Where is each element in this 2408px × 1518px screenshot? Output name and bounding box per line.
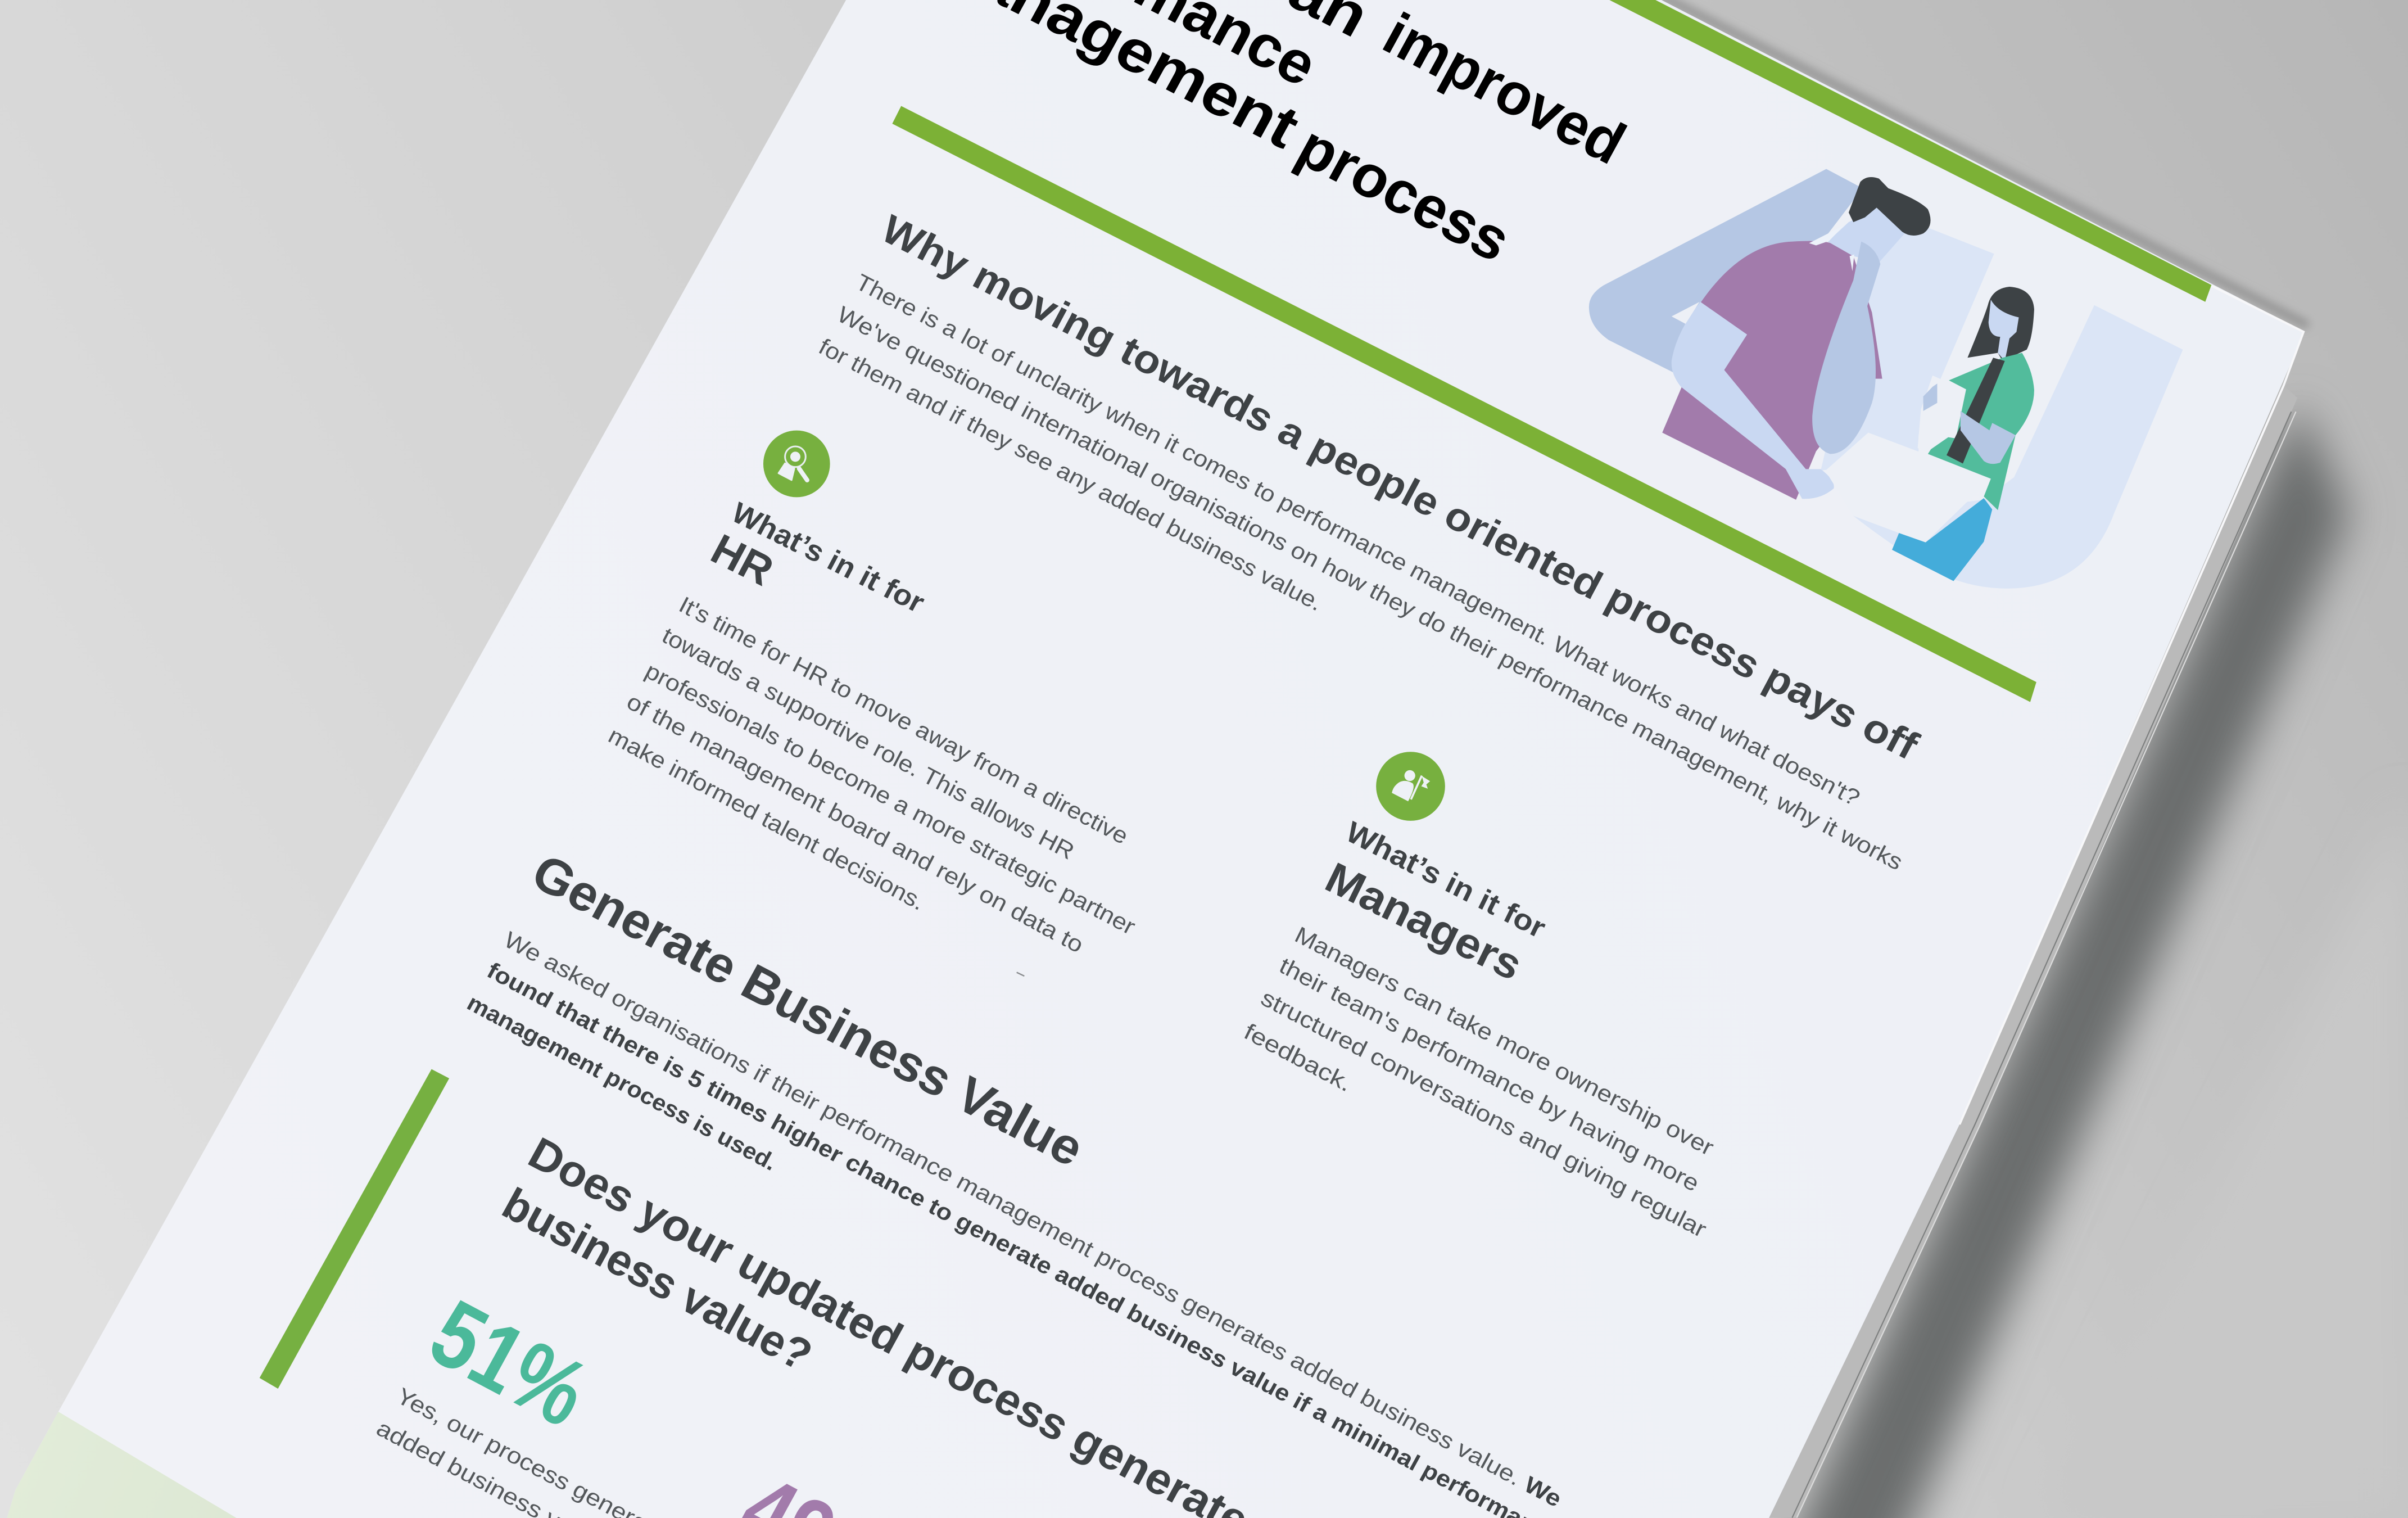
light green band at bottom of page [6,1412,241,1518]
statistic: 51%: 51% [414,1280,605,1447]
page edge highlights [1959,286,2303,1124]
subheading: what's in it for Managers: What’s in it for [1341,815,1551,945]
Managers paragraph: feedback. [1240,1018,1356,1097]
backdrop shape: U [1853,305,2183,589]
green divider bar [892,106,2036,702]
section heading: why moving: Why moving towards a people oriented process pays off [874,207,1925,769]
intro paragraph: for them and if they see any added business value. [814,333,1327,616]
woman top [1928,353,2034,510]
HR paragraph: make informed talent decisions. [604,722,929,915]
title [915,0,1636,274]
woman legs [1892,498,1992,581]
laptop [1825,432,1991,543]
Managers paragraph: structured conversations and giving regular [1257,984,1710,1243]
HR paragraph: professionals to become a more strategic partner [641,657,1139,940]
man collar [1809,225,1844,246]
woman hand [1923,383,1937,411]
drop shadow of brochure [1766,403,2350,1518]
Managers paragraph: their team's performance by having more [1275,952,1703,1197]
business value paragraph: We asked organisations if their performance management process generates added business value. We [500,927,1566,1512]
backdrop shape: dark [1589,169,1863,374]
icon: magnifier over person [763,431,830,497]
HR paragraph: towards a supportive role. This allows HR [658,622,1079,865]
icon: person with flag [1376,752,1445,821]
brochure page stack edge [1768,386,2297,1517]
woman face [1989,300,2019,361]
subheading: what's in it for Managers [1318,815,1551,990]
top green bar [1609,0,2211,302]
lighter floor patch, lower right [2043,799,2408,1517]
intro paragraph: We've questioned international organisations on how they do their performance management, why it works [833,301,1907,875]
statistic: 51% [372,1280,683,1518]
paper held by woman [1918,376,1965,451]
speck [1017,973,1024,976]
woman arm [1961,411,2016,464]
HR paragraph [604,591,1139,958]
man neck and face [1828,207,1904,263]
title: process [1287,112,1522,274]
HR paragraph: of the management board and rely on data to [623,688,1088,958]
Managers paragraph [1240,921,1718,1243]
subheading: what's in it for HR: HR [704,525,781,595]
illustration: two colleagues with laptop [1589,169,2183,589]
intro paragraph: There is a lot of unclarity when it comes to performance management. What works and what doesn't? [852,269,1864,811]
man arm and hand [1672,302,1834,499]
woman long hair strand [1947,358,2005,464]
woman hair [1967,287,2034,361]
HR paragraph: It's time for HR to move away from a directive [675,591,1133,849]
subheading: what's in it for HR: What’s in it for [726,496,930,619]
man shirt [1662,241,1882,500]
question heading: business value? [495,1178,821,1380]
Managers paragraph: Managers can take more ownership over [1291,921,1718,1161]
business value paragraph: management process is used. [463,990,781,1176]
man hair [1849,177,1931,236]
business value paragraph: found that there is 5 times higher chance to generate added business value if a minimal performance [483,957,1565,1518]
left green accent bar [260,1069,449,1389]
man other arm [1812,242,1880,454]
sleeve gap [1672,302,1700,324]
top edge contact shadow [1655,0,2310,329]
section heading: generate business value: Generate Business Value [523,843,1093,1178]
backdrop shape: light [1821,209,1994,471]
subheading: what's in it for Managers: Managers [1318,853,1529,990]
title: improved [1373,0,1636,177]
